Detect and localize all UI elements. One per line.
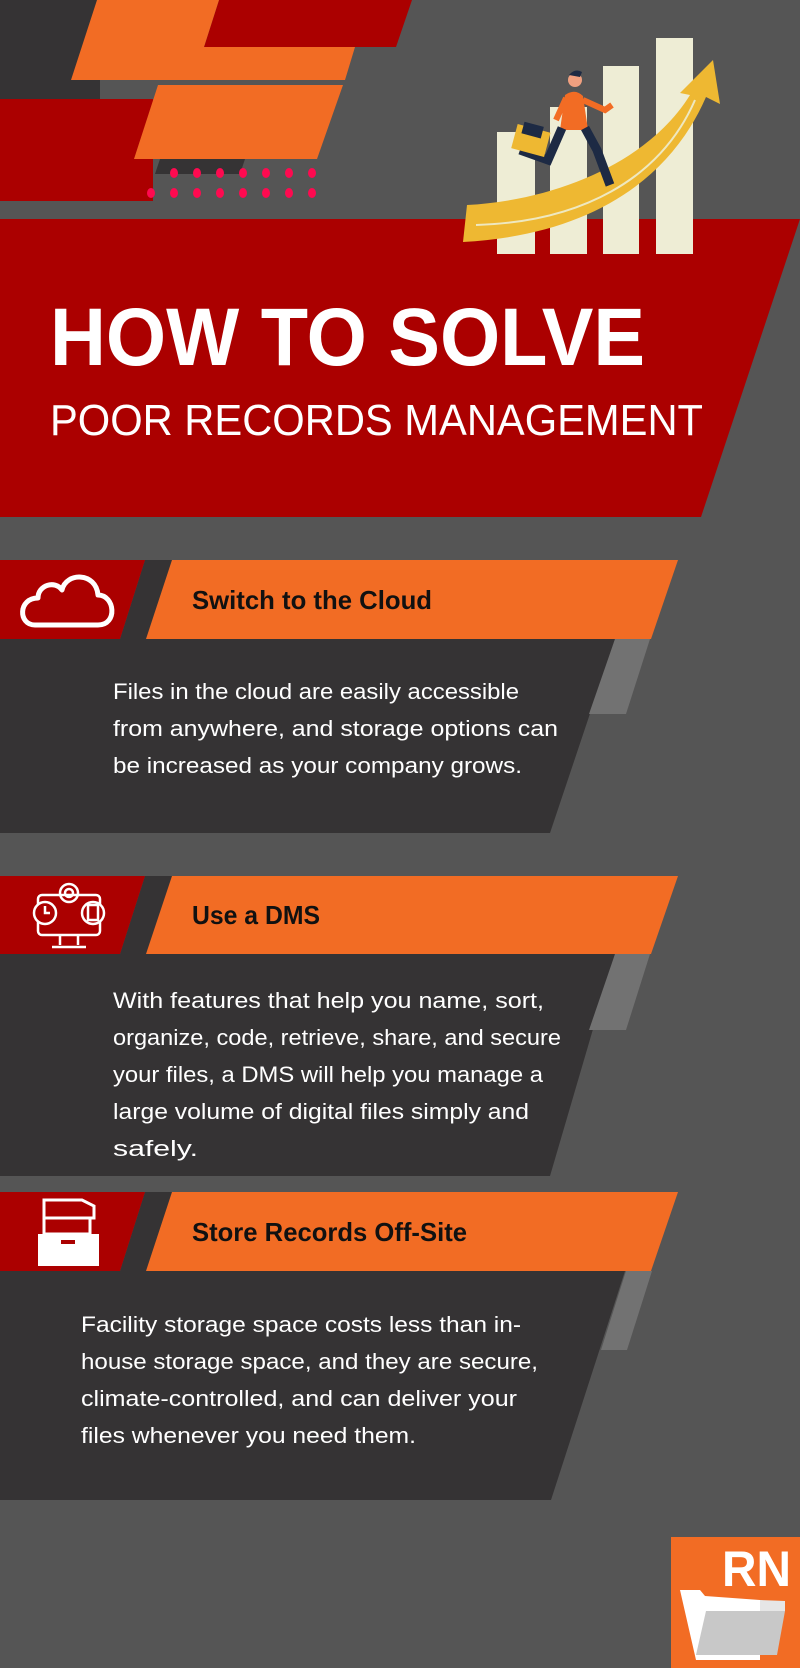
body text [81,1312,538,1448]
body text: be increased as your company grows. [113,753,522,778]
section 2: Use a DMS [0,876,678,1176]
heading: Use a DMS [192,900,320,930]
body text [113,679,558,778]
subtitle: POOR RECORDS MANAGEMENT [50,396,703,445]
body text: house storage space, and they are secure, [81,1349,538,1374]
title banner [0,219,800,517]
body text: files whenever you need them. [81,1423,416,1448]
body text: Facility storage space costs less than in- [81,1312,521,1337]
illustration: growth chart with runner [463,38,720,254]
icon: DMS monitor with gear, clock, document [34,884,104,947]
icon: cloud [23,577,112,625]
body text: With features that help you name, sort, [113,988,544,1013]
body text: large volume of digital files simply and [113,1099,529,1124]
logo: RN folder: RN [722,1541,791,1597]
section 1: Switch to the Cloud [0,560,678,833]
body text: from anywhere, and storage options can [113,716,558,741]
heading: Store Records Off-Site [192,1217,467,1247]
icon: file cabinet [38,1200,99,1266]
heading: Switch to the Cloud [192,585,432,615]
title: HOW TO SOLVE [50,292,645,383]
body text: Files in the cloud are easily accessible [113,679,519,704]
body text: climate-controlled, and can deliver your [81,1386,517,1411]
logo: RN folder [671,1537,800,1668]
body text: organize, code, retrieve, share, and secure [113,1025,561,1050]
body text: your files, a DMS will help you manage a [113,1062,544,1087]
decorative header shapes [0,0,412,201]
dots pattern [147,168,316,198]
body text: safely. [113,1136,198,1161]
section 3: Store Records Off-Site [0,1192,678,1500]
body text [113,988,561,1161]
person [511,71,612,185]
